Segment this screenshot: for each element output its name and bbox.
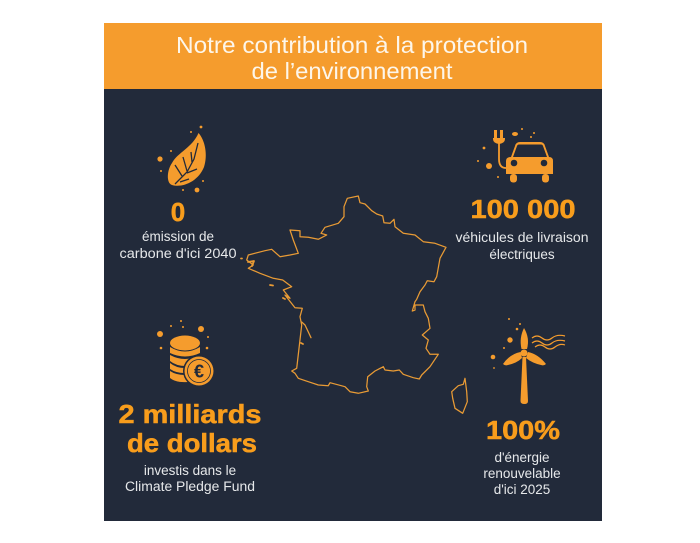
title banner: Notre contribution à la protection <box>176 32 528 58</box>
stat: climate pledge fund: de dollars <box>127 428 257 458</box>
icon: euro coins: € <box>194 362 204 382</box>
stat: electric vehicles: 100 000 <box>470 194 576 224</box>
stat: climate pledge fund: Climate Pledge Fund <box>125 479 255 494</box>
stat: climate pledge fund <box>118 320 262 494</box>
stat: electric vehicles: véhicules de livraison <box>456 230 588 245</box>
stat: climate pledge fund: investis dans le <box>144 463 236 478</box>
icon: leaf <box>157 126 206 192</box>
stat: renewable energy: d'énergie <box>494 450 550 465</box>
Gironde estuary detail <box>302 322 311 338</box>
mainland outline <box>247 196 446 393</box>
Corsica <box>452 378 467 413</box>
stat: renewable energy: renouvelable <box>483 466 561 481</box>
stat: zero carbon: 0 <box>171 197 185 227</box>
stat: renewable energy: 100% <box>486 415 560 445</box>
title banner: de l’environnement <box>252 58 453 84</box>
stat: zero carbon <box>120 126 236 261</box>
stat: climate pledge fund: 2 milliards <box>118 399 262 429</box>
stat: electric vehicles <box>456 128 588 262</box>
map of France <box>241 196 467 413</box>
stat: renewable energy: d'ici 2025 <box>494 482 550 497</box>
stat: renewable energy <box>483 318 565 497</box>
icon: wind turbine <box>491 318 565 404</box>
Brittany coast and islands <box>241 258 303 344</box>
panel: dark background <box>104 89 602 521</box>
icon: euro coins <box>157 320 215 387</box>
stat: electric vehicles: électriques <box>489 247 555 262</box>
stat: zero carbon: émission de <box>142 229 214 244</box>
stat: zero carbon: carbone d'ici 2040 <box>120 246 236 261</box>
icon: electric car <box>477 128 553 182</box>
title banner <box>104 23 602 89</box>
